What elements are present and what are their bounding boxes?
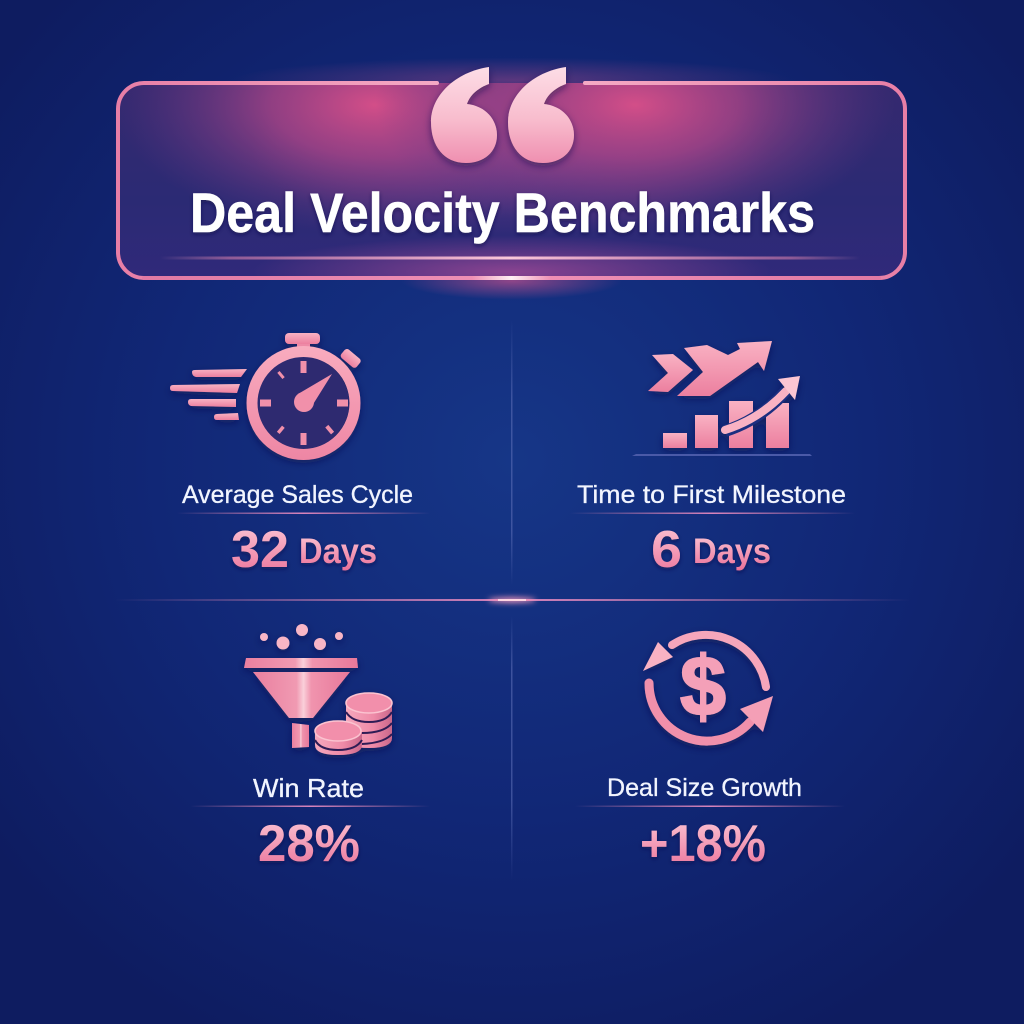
label rule [177,512,430,514]
vertical divider [511,320,512,585]
label rule [190,806,430,807]
panel: title banner [118,58,905,300]
icon: arrows and bar chart [648,341,800,448]
icon: stopwatch [170,333,362,454]
panel: win rate [190,624,430,873]
value [651,521,771,579]
chart baseline [632,454,812,456]
icon: dollar with cycle arrows [643,635,773,741]
panel: time to first milestone [570,341,855,579]
banner inner rule [160,256,860,260]
label: Win Rate [253,773,364,803]
label: Deal Size Growth [607,774,802,802]
value: +18% [640,815,766,873]
value: Days [299,532,377,571]
value: 28% [258,815,360,873]
value: Days [693,532,771,571]
horizontal divider [115,598,910,602]
panel: average sales cycle [170,333,430,579]
title: Deal Velocity Benchmarks [190,181,815,244]
label rule [570,512,855,514]
icon: dollar with cycle arrows: $ [680,639,726,733]
value [231,521,377,579]
icon: quotation mark [431,67,574,163]
value: 6 [651,521,682,579]
banner border [118,83,905,278]
value: 32 [231,521,289,579]
icon: funnel and coins [244,624,392,755]
label: Time to First Milestone [577,481,846,509]
panel: deal size growth [575,635,845,873]
label: Average Sales Cycle [182,481,413,509]
label rule [575,806,845,807]
vertical divider lower [511,615,512,880]
